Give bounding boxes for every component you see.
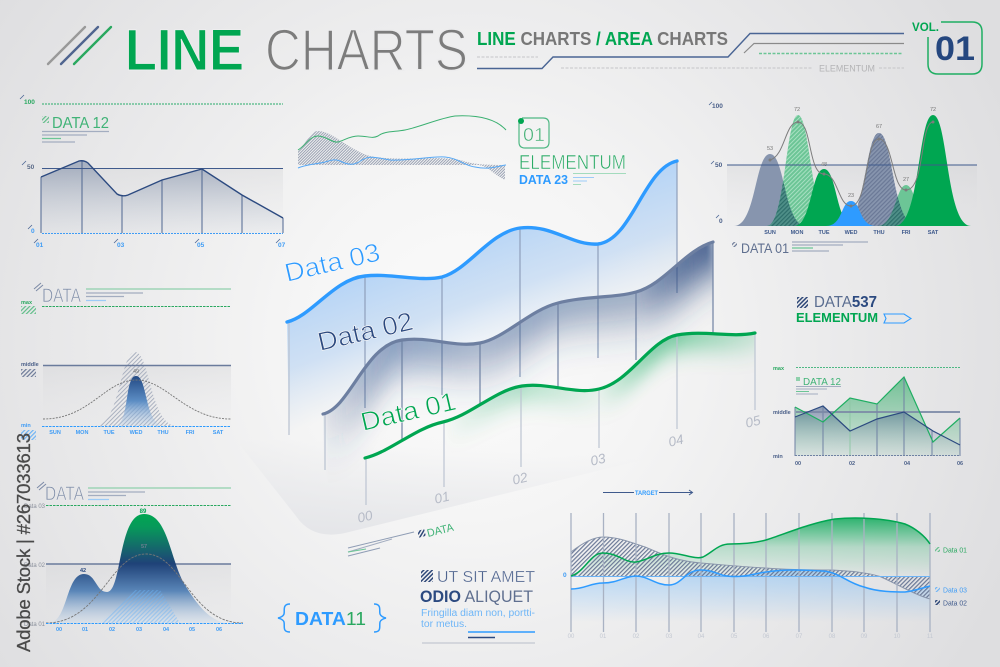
axis labels: 03 (136, 627, 142, 633)
bell: sun (734, 154, 806, 226)
verticals: data 02 (325, 242, 713, 470)
dashed bell (46, 554, 243, 623)
day labels: THU (873, 230, 885, 236)
subheading: ELEMENTUM (796, 311, 878, 325)
heading: DATA 12 (52, 115, 109, 132)
icon: three slashes (48, 27, 111, 64)
axis labels (712, 103, 723, 225)
value labels: 23 (848, 193, 854, 199)
axis labels: 06 (957, 461, 963, 467)
axis labels: 01 (36, 242, 44, 249)
circuit lines (477, 34, 904, 68)
series labels: Data 02 (24, 563, 46, 569)
top line (46, 504, 231, 506)
axis labels: 100 (24, 99, 35, 106)
axis labels: 00 (795, 461, 801, 467)
dot (518, 118, 524, 124)
middle line (43, 364, 231, 366)
caption lines (86, 289, 231, 300)
legend: Data 02 (943, 600, 967, 608)
day labels: SAT (213, 430, 224, 436)
bell: mon (767, 115, 831, 226)
swatch (417, 529, 426, 538)
bell hatch: mon (767, 115, 831, 226)
range labels (773, 366, 791, 460)
overlap: sun and mon (767, 180, 800, 226)
range labels: min (21, 423, 31, 429)
value labels: 67 (876, 124, 882, 130)
text: DATA11 (295, 609, 366, 629)
axis labels: 08 (829, 634, 836, 640)
backdrop (42, 168, 283, 233)
day labels: TUE (818, 230, 830, 236)
day labels: TUE (104, 430, 115, 436)
navy line (795, 406, 960, 445)
max line (42, 103, 283, 105)
day labels: SUN (49, 430, 61, 436)
verticals (795, 377, 960, 456)
number: 01 (523, 125, 545, 145)
max line (42, 306, 231, 308)
blue area (571, 570, 930, 622)
caption lines (792, 242, 868, 251)
filled bell (114, 376, 165, 426)
panel: target area chart (563, 490, 967, 640)
value labels: 48 (821, 162, 827, 168)
axis labels: 01 (82, 627, 88, 633)
axis labels: 02 (849, 461, 855, 467)
hatch swatch (42, 116, 49, 123)
zero line (571, 576, 930, 578)
slash icon (37, 482, 46, 490)
swatch (732, 242, 737, 247)
main area chart (282, 161, 762, 526)
badge frame (928, 22, 982, 74)
axis labels: 04 (904, 461, 911, 467)
baseline (46, 622, 243, 624)
axis labels: 06 (216, 627, 222, 633)
axis labels: 09 (861, 634, 868, 640)
green area (571, 518, 930, 576)
line two: ODIO ALIQUET (420, 587, 533, 606)
value labels (767, 107, 936, 199)
title word: LINE: LINE (125, 18, 244, 83)
axis labels (356, 413, 762, 526)
value labels: 72 (794, 107, 800, 113)
axis labels: 07 (796, 634, 803, 640)
body line one: Fringilla diam non, portti- (421, 608, 535, 619)
day labels: WED (130, 430, 142, 436)
axis labels: 50 (715, 162, 723, 169)
value labels: 72 (930, 107, 936, 113)
dashed bell (43, 380, 231, 419)
callout: 01 elementum data 23 (518, 118, 626, 187)
line: data 03 (287, 161, 677, 322)
backdrop (727, 165, 977, 226)
area glow: data 02 (323, 242, 713, 414)
caption lines (573, 174, 626, 184)
label: data11 (278, 604, 386, 632)
axis labels: 50 (27, 164, 35, 171)
axis labels: 00 (356, 508, 374, 526)
axis labels: 02 (109, 627, 115, 633)
bell: wed (826, 201, 876, 226)
caption lines (88, 488, 231, 500)
series labels (24, 504, 46, 628)
day labels: SUN (764, 230, 776, 236)
day labels: MON (791, 230, 803, 236)
axis labels (56, 627, 222, 633)
range labels: min (773, 454, 783, 460)
line: data 02 (323, 242, 713, 414)
arrow (884, 314, 911, 323)
verticals (41, 161, 283, 233)
hatch bell (95, 352, 177, 426)
green line (571, 518, 930, 576)
value labels (80, 509, 147, 574)
chart: small wave chart (298, 116, 506, 180)
axis labels: 05 (731, 634, 738, 640)
caption lines (42, 132, 109, 142)
axis labels: 10 (894, 634, 901, 640)
hatch outline (571, 537, 930, 599)
line: data 01 (365, 333, 755, 458)
area (50, 514, 224, 623)
day labels: FRI (186, 430, 195, 436)
panel: data double peak chart (24, 482, 243, 633)
background shelf shape (240, 440, 650, 535)
baseline (795, 454, 960, 456)
day labels: SAT (928, 230, 939, 236)
bell hatch: thu (841, 133, 917, 226)
hatch overlay (100, 590, 180, 623)
label: rotated data (348, 522, 456, 556)
axis labels: 05 (189, 627, 195, 633)
hatch band (571, 537, 930, 599)
target arrow: TARGET (635, 490, 658, 497)
header: main title (48, 18, 468, 83)
heading: DATA 01 (741, 240, 789, 256)
axis labels: 04 (163, 627, 170, 633)
area (41, 161, 283, 233)
area: data 03 (287, 161, 677, 435)
hatch icon (421, 570, 433, 582)
legend (935, 547, 967, 608)
axis labels: 05 (197, 242, 205, 249)
range labels (21, 300, 39, 429)
axis labels: 0 (31, 228, 35, 235)
heading: DATA (42, 286, 81, 307)
axis labels: 03 (117, 242, 125, 249)
bell: fri (878, 185, 934, 226)
name: ELEMENTUM (519, 152, 626, 174)
stock credit: Adobe Stock | #267033613 (13, 433, 34, 652)
day labels: MON (76, 430, 88, 436)
value labels: 42 (80, 568, 86, 574)
midline (42, 168, 283, 170)
hatch band (298, 131, 505, 180)
zero label: 0 (563, 572, 567, 579)
green area (795, 377, 960, 456)
day labels: FRI (902, 230, 911, 236)
legend: Data 03 (943, 588, 967, 594)
trend curve (770, 122, 933, 206)
panel: data 12 top left chart (20, 95, 286, 249)
swatches (21, 306, 36, 440)
subtitle: LINE CHARTS / AREA CHARTS (477, 29, 728, 49)
panel: data max middle min bell chart (21, 283, 231, 440)
axis labels: 02 (633, 634, 640, 640)
heading: DATA (45, 484, 84, 505)
green line (795, 377, 960, 442)
text block: ut sit amet (420, 569, 535, 643)
series labels: Data 03 (24, 504, 46, 510)
axis labels: 07 (278, 242, 286, 249)
axis labels (795, 461, 963, 467)
green line (298, 116, 506, 150)
peak value: 49 (133, 369, 139, 375)
value labels: 27 (903, 177, 909, 183)
midline (796, 411, 960, 413)
tick slashes (709, 102, 719, 218)
badge: vol 01 (912, 20, 982, 74)
axis labels: 03 (666, 634, 673, 640)
day labels: THU (157, 430, 169, 436)
range labels: max (773, 366, 785, 372)
axis labels (24, 99, 286, 249)
bell: tue (794, 169, 854, 226)
axis labels: 04 (698, 634, 705, 640)
line one: UT SIT AMET (437, 569, 535, 586)
line series (41, 161, 283, 218)
min line (42, 426, 231, 428)
hatch icon (797, 297, 808, 308)
axis labels: 04 (667, 432, 685, 450)
label: data 02: Data 02 (315, 306, 416, 357)
area glow: data 01 (452, 334, 754, 434)
axis labels: 02 (511, 470, 529, 488)
range labels: middle (21, 362, 39, 368)
backdrop (43, 366, 231, 426)
axis labels: 03 (589, 451, 607, 469)
value labels: 57 (141, 544, 147, 550)
axis labels: 0 (719, 218, 723, 225)
series labels: Data 01 (24, 622, 46, 628)
caption lines (348, 532, 414, 556)
day labels (49, 430, 224, 436)
blue line (571, 570, 930, 592)
axis labels: 00 (568, 634, 575, 640)
verticals: data 03 (289, 161, 677, 435)
tick slashes (20, 95, 280, 243)
day labels (764, 230, 939, 236)
overlap: thu and fri (878, 196, 906, 226)
baseline (42, 232, 283, 234)
axis labels: 100 (712, 103, 723, 110)
axis labels: 05 (744, 413, 762, 431)
axis labels: 01 (433, 489, 451, 507)
vol label: VOL. (912, 20, 939, 34)
heading: DATA 12 (803, 376, 841, 388)
target arrow (603, 490, 692, 497)
axis labels: 01 (600, 634, 607, 640)
label: elementum: ELEMENTUM (819, 64, 875, 74)
right brace (374, 604, 386, 632)
slash icon (34, 283, 43, 291)
header: subtitle and circuit lines (477, 29, 904, 74)
panel: weekly bell chart top right (709, 102, 977, 256)
frame (519, 118, 549, 148)
swatch (796, 377, 800, 381)
mid line (46, 563, 231, 565)
verticals (571, 513, 930, 632)
axis labels: 00 (56, 627, 62, 633)
navy area (795, 406, 960, 456)
range labels: middle (773, 410, 791, 416)
label: data 01: Data 01 (358, 386, 459, 437)
backdrop (46, 564, 231, 624)
max line (796, 366, 960, 368)
badge number: 01 (935, 30, 975, 68)
rule lines (422, 632, 535, 643)
range labels: max (21, 300, 33, 306)
legend: Data 01 (943, 548, 967, 554)
axis labels: 06 (763, 634, 770, 640)
left brace (278, 604, 290, 632)
heading: DATA537 (814, 294, 877, 311)
axis labels (568, 634, 934, 640)
midline (727, 164, 977, 166)
title word: CHARTS: CHARTS (265, 18, 468, 83)
bell: sat (895, 115, 971, 226)
value labels: 53 (767, 146, 773, 152)
bell: thu (841, 133, 917, 226)
data label: DATA 23 (519, 172, 568, 187)
verticals: data 01 (366, 333, 755, 505)
panel: data 12 right chart (773, 366, 963, 467)
trend points (768, 120, 934, 208)
body line two: tor metus. (421, 619, 467, 630)
label: data 03: Data 03 (282, 237, 383, 288)
caption lines (796, 386, 841, 394)
axis labels: 11 (927, 634, 934, 640)
callout: data537 (796, 294, 911, 325)
value labels: 89 (140, 509, 147, 515)
day labels: WED (845, 230, 857, 236)
blue line (298, 157, 506, 168)
text: DATA (426, 522, 456, 540)
